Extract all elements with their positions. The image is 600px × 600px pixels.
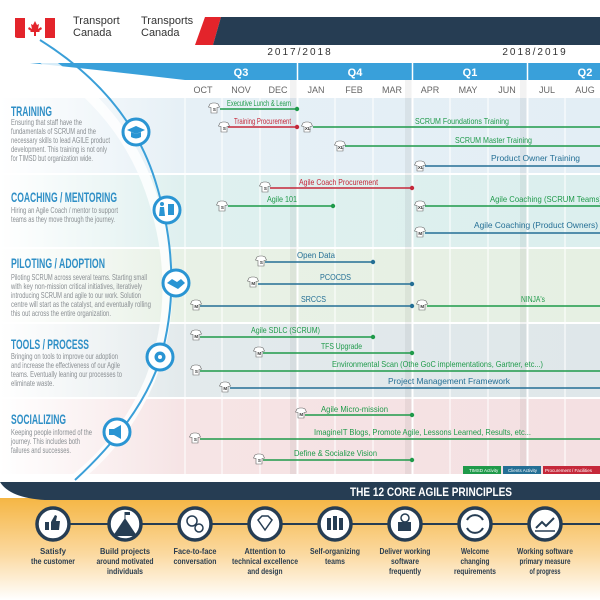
principles labels: requirements <box>454 566 496 576</box>
timeline grid and bars: failures and successes. <box>11 445 71 455</box>
labels <box>227 98 600 458</box>
shirts: M <box>420 304 424 309</box>
left text panels: COACHING / MENTORING <box>11 189 117 205</box>
timeline grid and bars: Hiring an Agile Coach / mentor to support <box>11 205 118 215</box>
quarter bar: Q2 <box>578 67 592 79</box>
shirts: XL <box>305 126 311 131</box>
labels: Agile 101 <box>267 194 297 204</box>
timeline grid and bars: Keeping people informed of the <box>11 427 92 437</box>
shirts: M <box>299 412 303 417</box>
timeline grid and bars: eliminate waste. <box>11 378 54 388</box>
labels: TFS Upgrade <box>321 341 362 351</box>
shirts <box>190 103 428 464</box>
labels: SRCCS <box>301 294 326 304</box>
principles labels: Welcome <box>461 546 489 556</box>
labels: Define & Socialize Vision <box>294 448 377 458</box>
labels: NINJA's <box>521 294 545 304</box>
principles labels: technical excellence <box>232 556 298 566</box>
timeline grid and bars: Bringing on tools to improve our adoption <box>11 351 118 361</box>
timeline grid and bars: and increase the effectiveness of our Agile <box>11 360 120 370</box>
timeline grid and bars: THE 12 CORE AGILE PRINCIPLES <box>350 485 512 499</box>
quarter bar: APR <box>421 85 440 95</box>
shirts: XL <box>418 205 424 210</box>
shirts: M <box>251 281 255 286</box>
principles labels: Deliver working <box>380 546 430 556</box>
icon circles <box>104 119 189 445</box>
legend: TIMSD Activity <box>469 468 499 473</box>
principles labels: of progress <box>530 566 561 576</box>
principles labels: Face-to-face <box>174 546 217 556</box>
timeline grid and bars: journey. This includes both <box>10 436 80 446</box>
labels: SCRUM Foundations Training <box>415 116 509 126</box>
shirts: S <box>195 369 198 374</box>
principles icons <box>37 508 600 540</box>
quarter bar: JUN <box>498 85 516 95</box>
timeline grid and bars: Ensuring that staff have the <box>11 117 82 127</box>
quarter bar: Q1 <box>463 67 477 79</box>
shirts: S <box>258 458 261 463</box>
header: Transport Canada logo: Transport <box>73 15 120 27</box>
header bar <box>195 17 600 45</box>
row backgrounds <box>46 98 600 474</box>
labels: Executive Lunch & Learn <box>227 98 291 108</box>
text: 2018/2019 <box>502 47 568 58</box>
labels: Project Management Framework <box>388 376 511 386</box>
quarter bar: MAR <box>382 85 402 95</box>
left text panels: SOCIALIZING <box>11 411 66 427</box>
labels: Environmental Scan (Othe GoC implementations, Gartner, etc...) <box>332 359 543 369</box>
legend: Procurement / Facilities <box>545 468 593 473</box>
principles labels: software <box>391 556 419 566</box>
quarter bar: JAN <box>307 85 325 95</box>
labels: Training Procurement <box>234 116 291 126</box>
principles labels: and design <box>248 566 282 576</box>
principles labels <box>31 546 573 576</box>
shirts: S <box>194 437 197 442</box>
timeline grid and bars: this out across the entire organization. <box>11 308 111 318</box>
bars <box>200 107 600 462</box>
principles labels: Working software <box>517 546 573 556</box>
principles labels: primary measure <box>520 556 571 566</box>
labels: Agile SDLC (SCRUM) <box>251 325 320 335</box>
legend: Clients Activity <box>508 468 538 473</box>
quarter bar: Q3 <box>234 67 248 79</box>
yellow principles band <box>0 498 600 600</box>
header: Transport Canada logo: Canada <box>141 27 180 39</box>
timeline grid and bars: teams as they move through the journey. <box>11 214 115 224</box>
principles labels: teams <box>325 556 345 566</box>
quarter bar: JUL <box>539 85 555 95</box>
left text panels <box>11 103 117 427</box>
shirts: S <box>213 107 216 112</box>
labels: Product Owner Training <box>491 153 580 163</box>
timeline grid and bars: necessary skills to lead AGILE product <box>11 135 110 145</box>
shirts: S <box>264 186 267 191</box>
shirts: S <box>260 260 263 265</box>
left text panels: TOOLS / PROCESS <box>11 336 89 352</box>
arc <box>0 35 168 490</box>
quarter bar: FEB <box>345 85 363 95</box>
labels: Agile Coach Procurement <box>299 177 379 187</box>
labels: Agile Micro-mission <box>321 404 388 414</box>
labels: ImagineIT Blogs, Promote Agile, Lessons Learned, Results, etc... <box>314 427 531 437</box>
principles labels: changing <box>460 556 490 566</box>
principles labels: Build projects <box>100 546 150 556</box>
quarter bar <box>30 63 600 98</box>
timeline grid and bars: with key non-mission critical initiatives, iteratively <box>10 281 143 291</box>
left text panels: TRAINING <box>11 103 52 119</box>
labels: SCRUM Master Training <box>455 135 532 145</box>
labels: Agile Coaching (Product Owners) <box>474 220 598 230</box>
timeline grid and bars: centre will start as the catalyst, and eventually rolling <box>11 299 151 309</box>
shirts: M <box>194 334 198 339</box>
shirts: S <box>223 126 226 131</box>
quarter bar: MAY <box>459 85 477 95</box>
shirts: M <box>223 386 227 391</box>
labels: PCOCDS <box>320 272 351 282</box>
header: Transport Canada logo: Transports <box>141 15 193 27</box>
quarter bar: DEC <box>268 85 288 95</box>
quarter bar: OCT <box>194 85 213 95</box>
header: Transport Canada logo <box>15 15 193 39</box>
shirts: M <box>418 231 422 236</box>
shirts: S <box>221 205 224 210</box>
legend <box>463 466 600 474</box>
principles labels: Self-organizing <box>310 546 360 556</box>
principles labels: individuals <box>107 566 143 576</box>
principles labels: conversation <box>174 556 216 566</box>
principles labels: the customer <box>31 556 76 566</box>
principles labels: around motivated <box>96 556 154 566</box>
header: Transport Canada logo: Canada <box>73 27 112 39</box>
left text panels: PILOTING / ADOPTION <box>11 255 105 271</box>
timeline grid and bars: Piloting SCRUM across several teams. Starting small <box>11 272 147 282</box>
quarter bar: Q4 <box>348 67 363 79</box>
principles labels: Attention to <box>244 546 286 556</box>
fiscal years: 2017/2018 <box>267 47 333 58</box>
principles labels: Satisfy <box>40 546 66 556</box>
timeline grid and bars: teams. Eventually leaning our processes to <box>11 369 122 379</box>
quarter bar: AUG <box>575 85 595 95</box>
labels: Open Data <box>297 250 335 260</box>
shirts: M <box>257 351 261 356</box>
bottom band <box>0 482 600 500</box>
principles labels: frequently <box>389 566 421 576</box>
timeline grid and bars: fundamentals of SCRUM and the <box>11 126 96 136</box>
icon: canadian flag <box>15 18 55 38</box>
timeline grid and bars: for TIMSD but organization wide. <box>11 153 93 163</box>
shirts: XL <box>418 165 424 170</box>
shirts: XL <box>338 145 344 150</box>
timeline grid and bars: development. This training is not only <box>11 144 108 154</box>
timeline grid and bars: introducing SCRUM and agile to our work. Solution <box>11 290 141 300</box>
quarter bar: NOV <box>231 85 251 95</box>
shirts: M <box>194 304 198 309</box>
